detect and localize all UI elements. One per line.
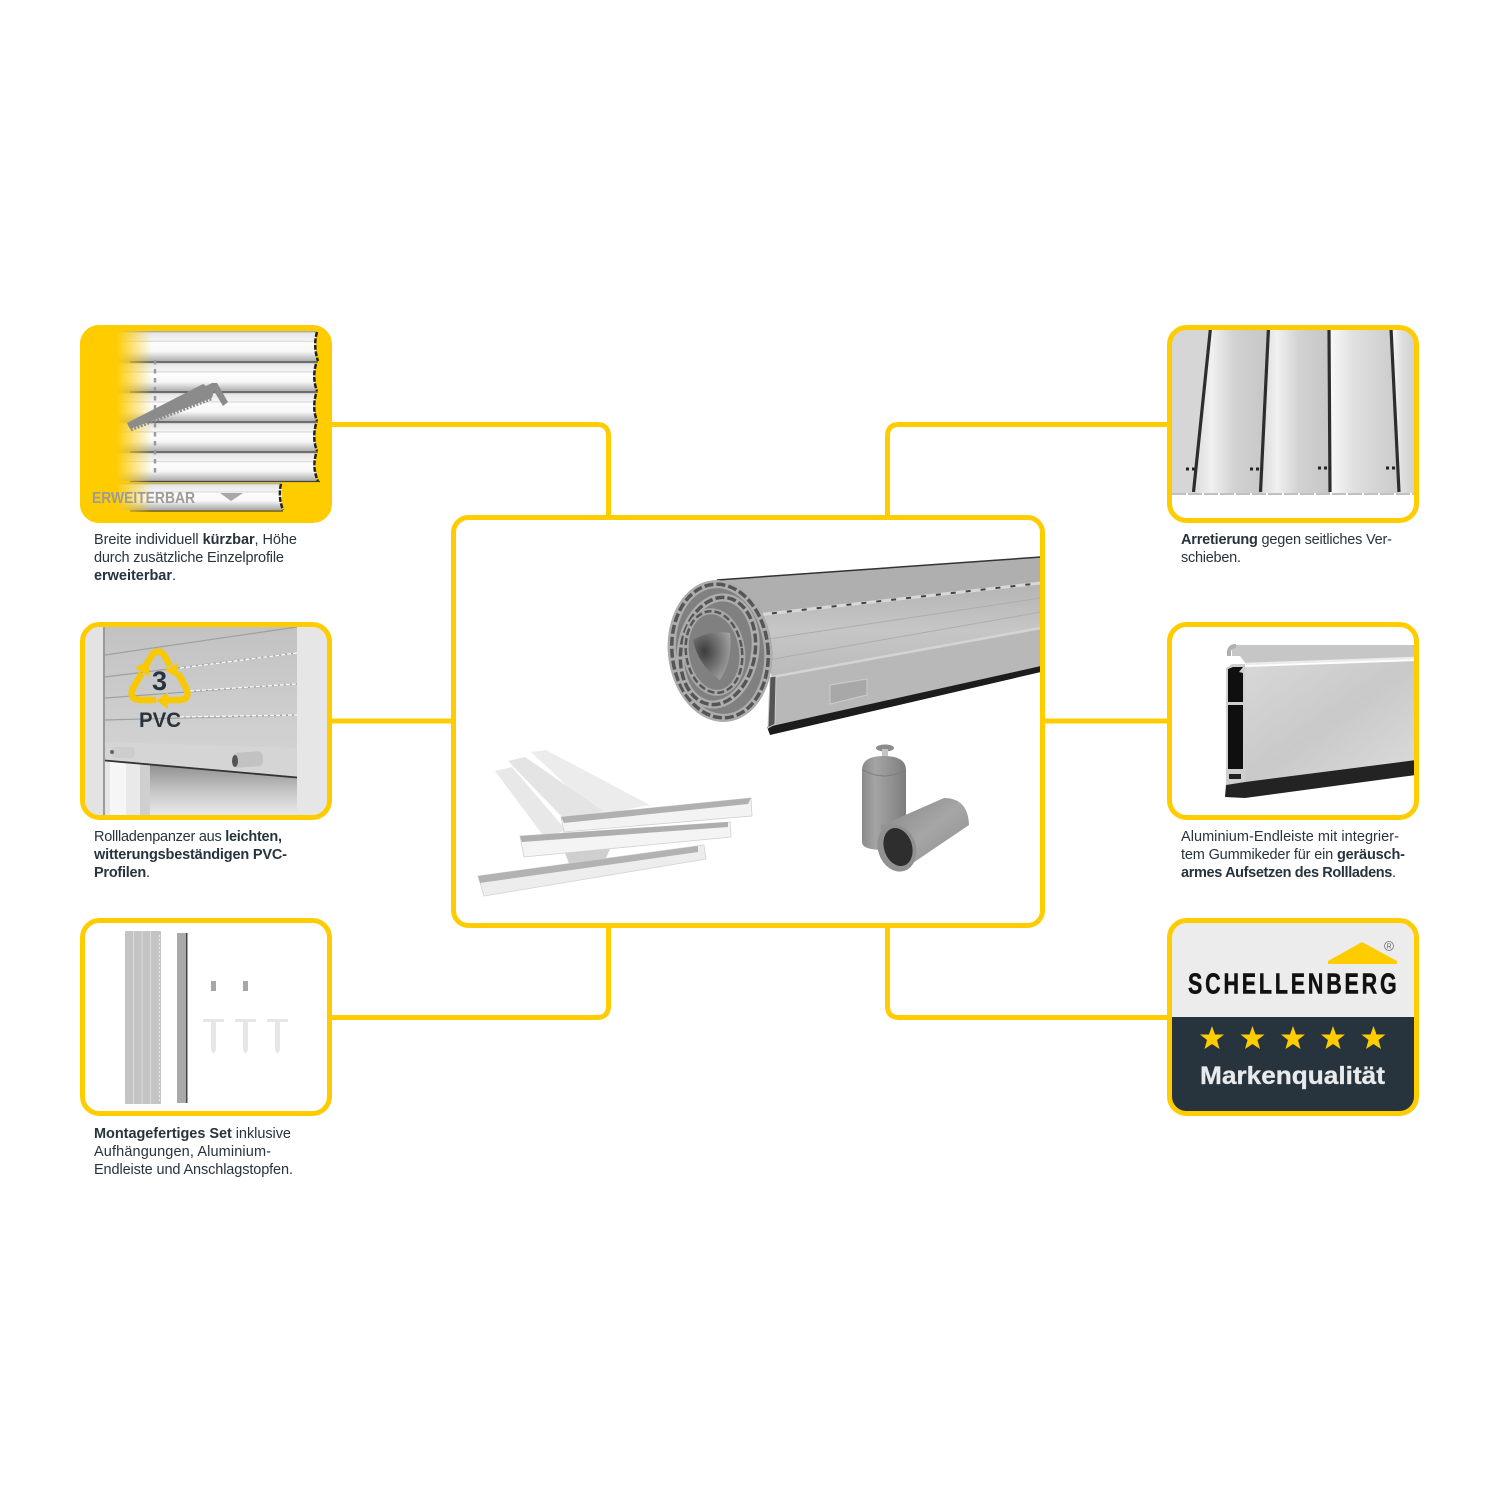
registered mark — [1384, 942, 1394, 950]
icon: five stars — [1200, 1026, 1386, 1049]
cut line — [154, 360, 156, 474]
panel: central product — [454, 518, 1042, 926]
stopper left — [112, 747, 135, 758]
text: PVC: Rollladenpanzer aus leichten, — [94, 829, 282, 845]
mounting brackets — [478, 750, 752, 896]
shutter slats — [125, 931, 161, 1104]
text: end rail — [1181, 829, 1405, 881]
end stops small — [211, 981, 248, 991]
icon: recycling symbol 3 PVC — [132, 652, 187, 732]
panel: aluminium end rail — [1170, 624, 1416, 818]
panel: locking detail — [1165, 328, 1420, 520]
icon: recycling symbol 3 PVC: PVC — [139, 709, 181, 732]
logo plate — [830, 679, 867, 704]
connector lines — [330, 424, 1170, 1018]
icon: saw — [127, 383, 228, 430]
text: PVC: witterungsbeständigen PVC- — [93, 847, 287, 863]
slats — [80, 325, 320, 523]
text: locking: schieben. — [1181, 550, 1241, 566]
registered mark: R — [1386, 944, 1392, 950]
brand name: SCHELLENBERG — [1188, 968, 1397, 1000]
text: end rail: tem Gummikeder für ein geräusch- — [1181, 847, 1405, 863]
hangers — [203, 1019, 288, 1054]
panel: ready-to-mount set — [82, 920, 330, 1114]
text: cuttable: Breite individuell kürzbar, Höhe — [94, 532, 297, 548]
panel: PVC profiles — [82, 624, 330, 818]
panel: cuttable and extendable — [80, 325, 332, 523]
profile end — [1226, 664, 1245, 785]
text: cuttable — [94, 532, 297, 584]
icon: down triangle — [220, 493, 243, 501]
panel: brand badge — [1170, 920, 1416, 1114]
text: cuttable: durch zusätzliche Einzelprofile — [94, 550, 284, 566]
text: set: Montagefertiges Set inklusive — [94, 1126, 291, 1142]
stopper right — [232, 751, 263, 768]
text: locking: Arretierung gegen seitliches Ver- — [1181, 532, 1392, 548]
rubber seal — [1225, 760, 1416, 798]
end rail — [177, 933, 188, 1103]
roller shutter roll — [661, 557, 1041, 735]
text: end rail: armes Aufsetzen des Rollladens. — [1181, 865, 1396, 881]
quality label: Markenqualität — [1200, 1062, 1386, 1090]
text: locking — [1181, 532, 1392, 566]
top hook and strip — [1232, 645, 1416, 664]
text: end rail: Aluminium-Endleiste mit integrier- — [1181, 829, 1399, 845]
text: PVC — [93, 829, 287, 881]
text: set — [94, 1126, 293, 1178]
text: set: Endleiste und Anschlagstopfen. — [94, 1162, 293, 1178]
icon: recycling symbol 3 PVC: 3 — [152, 666, 167, 696]
end stops — [862, 744, 969, 877]
text: PVC: Profilen. — [94, 865, 150, 881]
main face — [1245, 661, 1416, 782]
text: cuttable: erweiterbar. — [94, 568, 176, 584]
label: erweiterbar: ERWEITERBAR — [92, 490, 195, 507]
text: set: Aufhängungen, Aluminium- — [94, 1144, 271, 1160]
icon: logo roof — [1328, 942, 1397, 964]
